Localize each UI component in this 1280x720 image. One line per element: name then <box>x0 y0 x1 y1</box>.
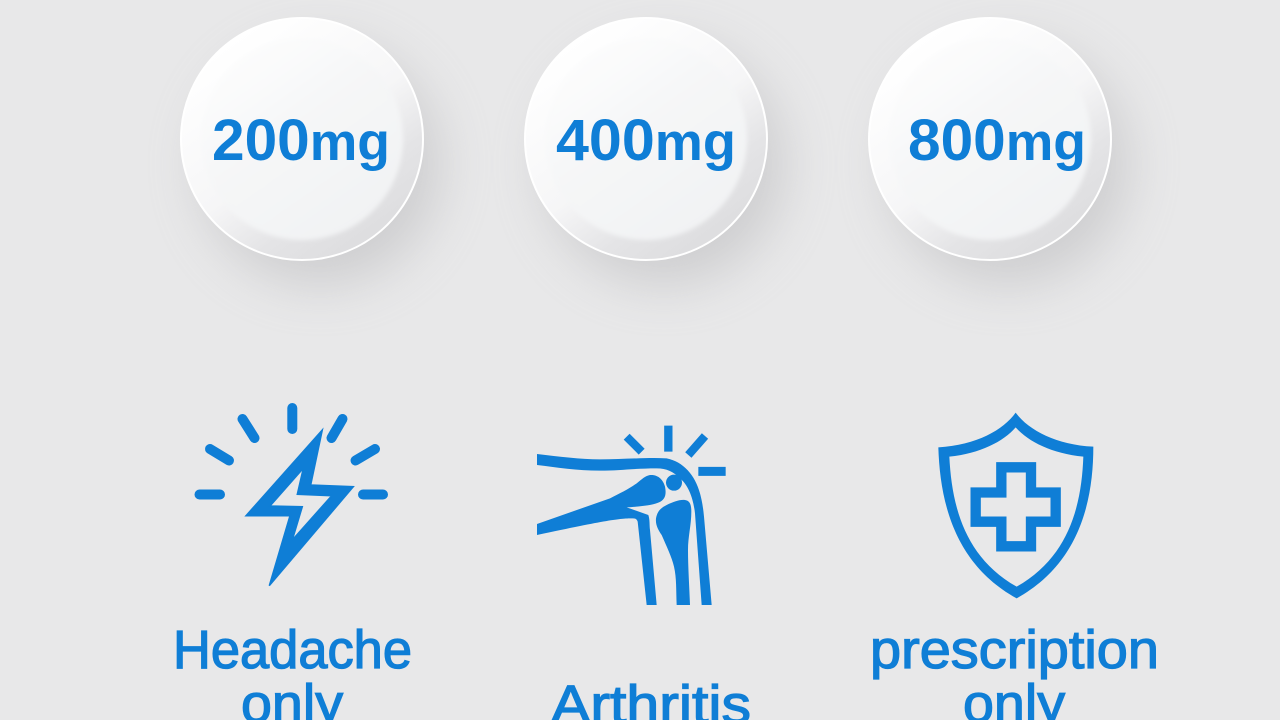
dose label: 200mg: 200mg <box>212 108 390 173</box>
pill: 200mg <box>181 18 440 284</box>
label: prescription only <box>870 620 1159 720</box>
label: Headache only: Headache <box>173 620 412 680</box>
icon: shield with medical cross <box>938 413 1093 598</box>
icon: arthritic knee joint <box>537 426 726 605</box>
pill: 400mg <box>525 18 784 284</box>
dose label: 800mg: 800mg <box>908 108 1086 173</box>
label: prescription only: prescription <box>870 620 1159 680</box>
pill: 800mg <box>869 18 1128 284</box>
dose label: 400mg: 400mg <box>556 108 736 173</box>
label: Headache only <box>173 620 412 720</box>
icon: headache lightning bolt with rays <box>200 408 383 586</box>
